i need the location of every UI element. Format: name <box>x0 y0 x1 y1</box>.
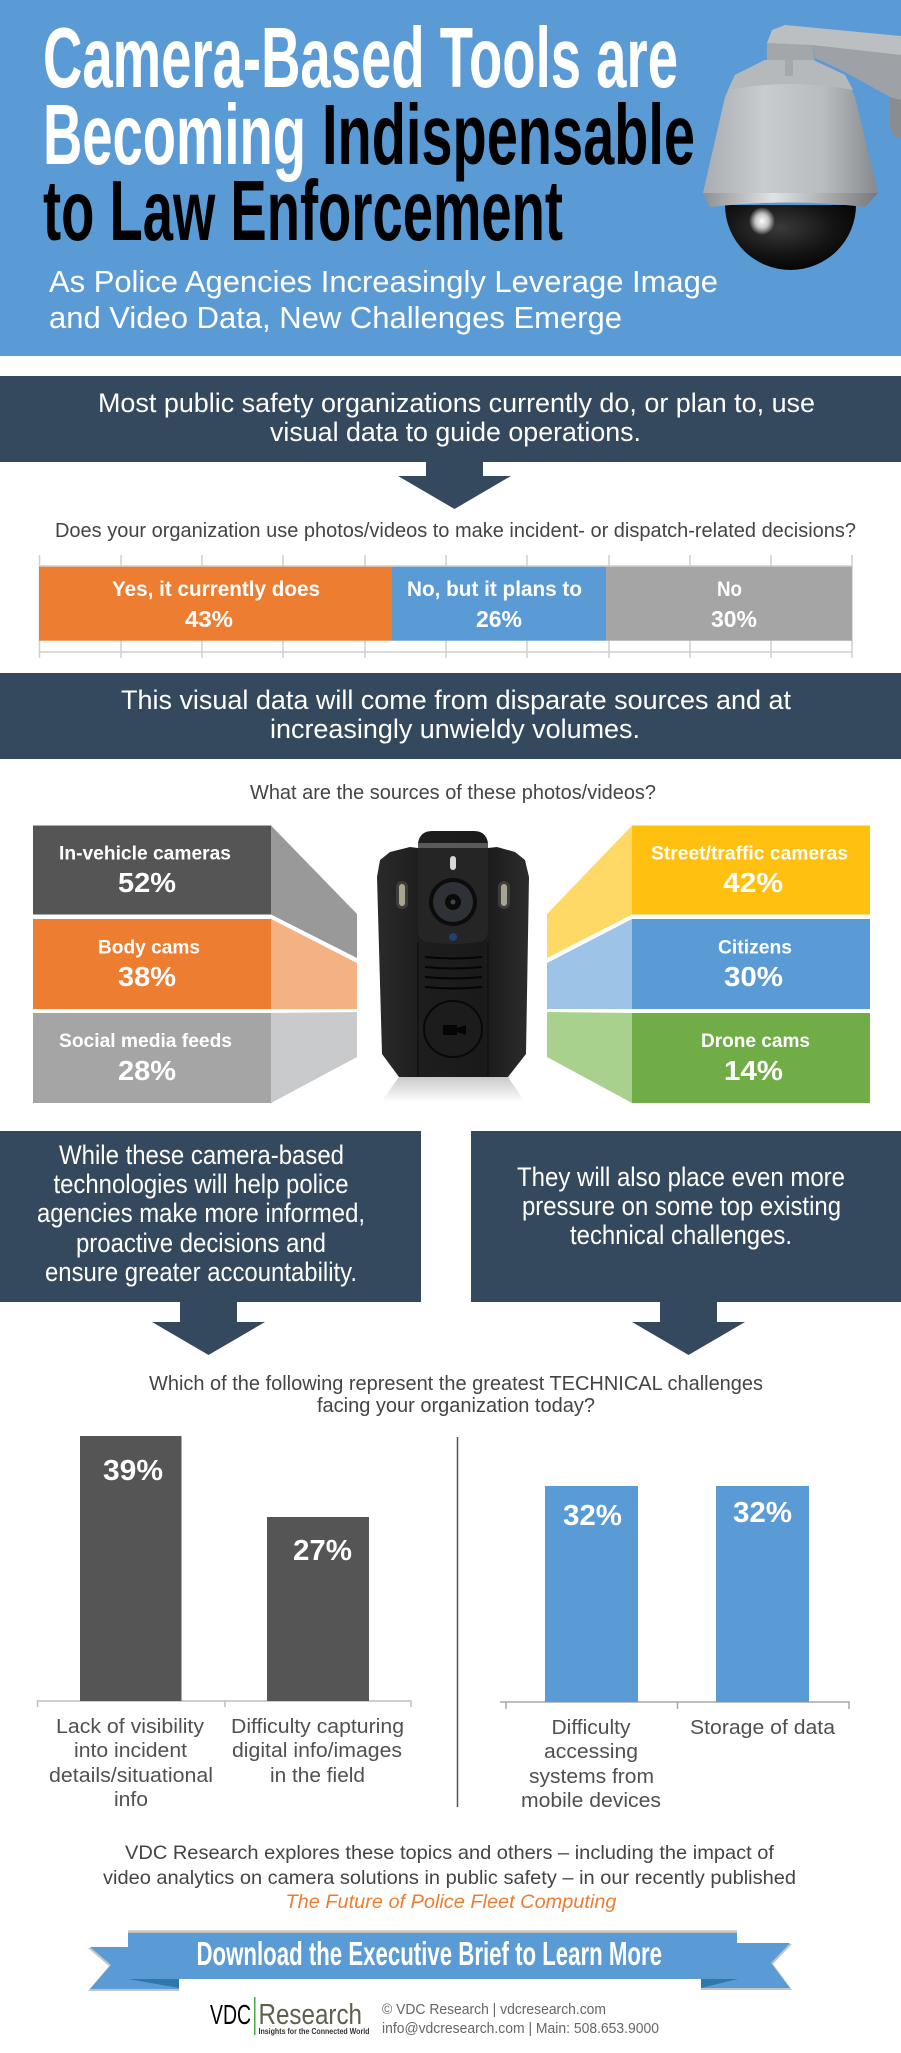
logo: VDC Research: VDC <box>210 1999 251 2030</box>
logo: VDC Research <box>210 1997 370 2036</box>
segment: yes: 43% <box>185 606 233 632</box>
panel: drone cams <box>547 1012 870 1103</box>
section banner: disparate sources: This visual data will come from disparate sources and at <box>121 685 792 715</box>
section banner: disparate sources: increasingly unwieldy volumes. <box>270 714 640 744</box>
panel: technical pressure callout: They will also place even more <box>517 1162 845 1192</box>
logo: VDC Research: Research <box>258 1999 362 2031</box>
bar: lack of visibility <box>80 1436 182 1701</box>
bar: difficulty capturing <box>267 1517 369 1701</box>
icon: dome security camera <box>703 25 901 270</box>
segment: no <box>606 567 852 641</box>
label: lack of visibility: into incident <box>74 1740 187 1762</box>
panel: in-vehicle cameras: 52% <box>118 867 176 898</box>
panel: social media feeds: Social media feeds <box>59 1031 232 1052</box>
segment: yes: Yes, it currently does <box>112 578 320 601</box>
panel: social media feeds <box>33 1012 357 1103</box>
label: lack of visibility: Lack of visibility <box>56 1716 204 1738</box>
label: lack of visibility <box>49 1716 213 1811</box>
title <box>43 11 695 259</box>
arrow: down <box>398 462 511 509</box>
panel: technical pressure callout: technical challenges. <box>570 1220 792 1250</box>
bar chart: left challenges <box>38 1436 411 1811</box>
bar: accessing systems: 32% <box>563 1500 622 1532</box>
label: lack of visibility: info <box>114 1789 148 1811</box>
label: difficulty capturing: Difficulty capturing <box>231 1716 404 1738</box>
panel: police agencies callout: agencies make more informed, <box>37 1198 365 1228</box>
label: difficulty capturing: digital info/images <box>232 1740 402 1762</box>
arrow: right down <box>632 1302 745 1355</box>
label: difficulty capturing <box>231 1716 404 1787</box>
question: photos/videos decisions: Does your organization use photos/videos to make incident- or dispatch-related decisions? <box>55 520 856 542</box>
label: accessing systems: systems from <box>529 1766 654 1788</box>
subtitle: As Police Agencies Increasingly Leverage Image <box>49 264 718 299</box>
section banner: public safety: visual data to guide operations. <box>270 417 641 447</box>
subtitle <box>49 264 718 335</box>
panel: body cams <box>33 919 357 1009</box>
footer contact: info@vdcresearch.com | Main: 508.653.9000 <box>382 2021 659 2037</box>
section banner: disparate sources <box>0 673 901 759</box>
panel: in-vehicle cameras <box>33 826 357 958</box>
question: sources: What are the sources of these photos/videos? <box>250 782 656 804</box>
segment: plans to <box>392 567 606 641</box>
arrow: left down <box>152 1302 265 1355</box>
question: technical challenges <box>149 1373 763 1417</box>
panel: technical pressure callout <box>471 1131 901 1302</box>
panel: street/traffic cameras: Street/traffic cameras <box>651 844 848 864</box>
panel: in-vehicle cameras: In-vehicle cameras <box>59 844 231 864</box>
panel: body cams: 38% <box>118 961 176 992</box>
segment: plans to: 26% <box>476 606 522 632</box>
text block: report promo: The Future of Police Fleet Computing <box>286 1891 617 1913</box>
label: difficulty capturing: in the field <box>270 1765 365 1787</box>
label: accessing systems: Difficulty <box>552 1717 630 1739</box>
footer contact <box>382 2002 659 2037</box>
ribbon: download banner: Download the Executive Brief to Learn More <box>196 1935 662 1972</box>
subtitle: and Video Data, New Challenges Emerge <box>49 300 622 335</box>
label: accessing systems: accessing <box>544 1741 638 1763</box>
title: Indispensable <box>322 88 695 183</box>
panel: social media feeds: 28% <box>118 1055 176 1086</box>
header panel <box>0 0 901 356</box>
segment: plans to: No, but it plans to <box>407 578 582 601</box>
panel: body cams: Body cams <box>98 938 200 958</box>
icon: body camera <box>377 831 529 1102</box>
section banner: public safety <box>0 376 901 462</box>
panel: citizens: 30% <box>724 961 783 992</box>
segment: no: 30% <box>711 606 757 632</box>
logo: VDC Research: Insights for the Connected World <box>258 2026 370 2036</box>
text block: report promo: video analytics on camera solutions in public safety – in our recently published <box>103 1867 796 1889</box>
panel: drone cams: Drone cams <box>701 1031 810 1052</box>
panel: citizens: Citizens <box>718 938 792 958</box>
bar: storage: 32% <box>733 1497 792 1529</box>
panel: street/traffic cameras: 42% <box>723 867 783 898</box>
label: accessing systems <box>521 1717 661 1812</box>
label: accessing systems: mobile devices <box>521 1790 661 1812</box>
text block: report promo: VDC Research explores these topics and others – including the impact of <box>125 1842 775 1864</box>
question: technical challenges: facing your organization today? <box>317 1395 595 1417</box>
label: lack of visibility: details/situational <box>49 1765 213 1787</box>
footer contact: © VDC Research | vdcresearch.com <box>382 2002 606 2018</box>
bar: difficulty capturing: 27% <box>293 1535 352 1567</box>
bar: storage <box>716 1486 809 1702</box>
segment: yes <box>39 567 392 641</box>
title: to Law Enforcement <box>43 164 563 259</box>
stacked bar chart <box>39 555 852 658</box>
bar: accessing systems <box>545 1486 638 1702</box>
text block: report promo <box>103 1842 796 1913</box>
bar chart: right challenges <box>500 1486 849 1812</box>
panel: technical pressure callout: pressure on some top existing <box>522 1191 841 1221</box>
segment: no: No <box>717 578 742 601</box>
bar: lack of visibility: 39% <box>103 1455 163 1487</box>
panel: street/traffic cameras <box>547 826 870 958</box>
panel: police agencies callout: ensure greater accountability. <box>45 1257 357 1287</box>
panel: drone cams: 14% <box>724 1055 783 1086</box>
section banner: public safety: Most public safety organizations currently do, or plan to, use <box>98 388 815 418</box>
panel: police agencies callout: technologies will help police <box>54 1169 348 1199</box>
label: storage: Storage of data <box>690 1717 836 1739</box>
panel: police agencies callout: proactive decisions and <box>76 1228 326 1258</box>
panel: police agencies callout <box>0 1131 421 1302</box>
panel: citizens <box>547 919 870 1009</box>
ribbon: download banner <box>88 1930 792 1991</box>
panel: police agencies callout: While these camera-based <box>59 1140 344 1170</box>
question: technical challenges: Which of the following represent the greatest TECHNICAL challenges <box>149 1373 763 1395</box>
title: Becoming <box>43 88 306 183</box>
